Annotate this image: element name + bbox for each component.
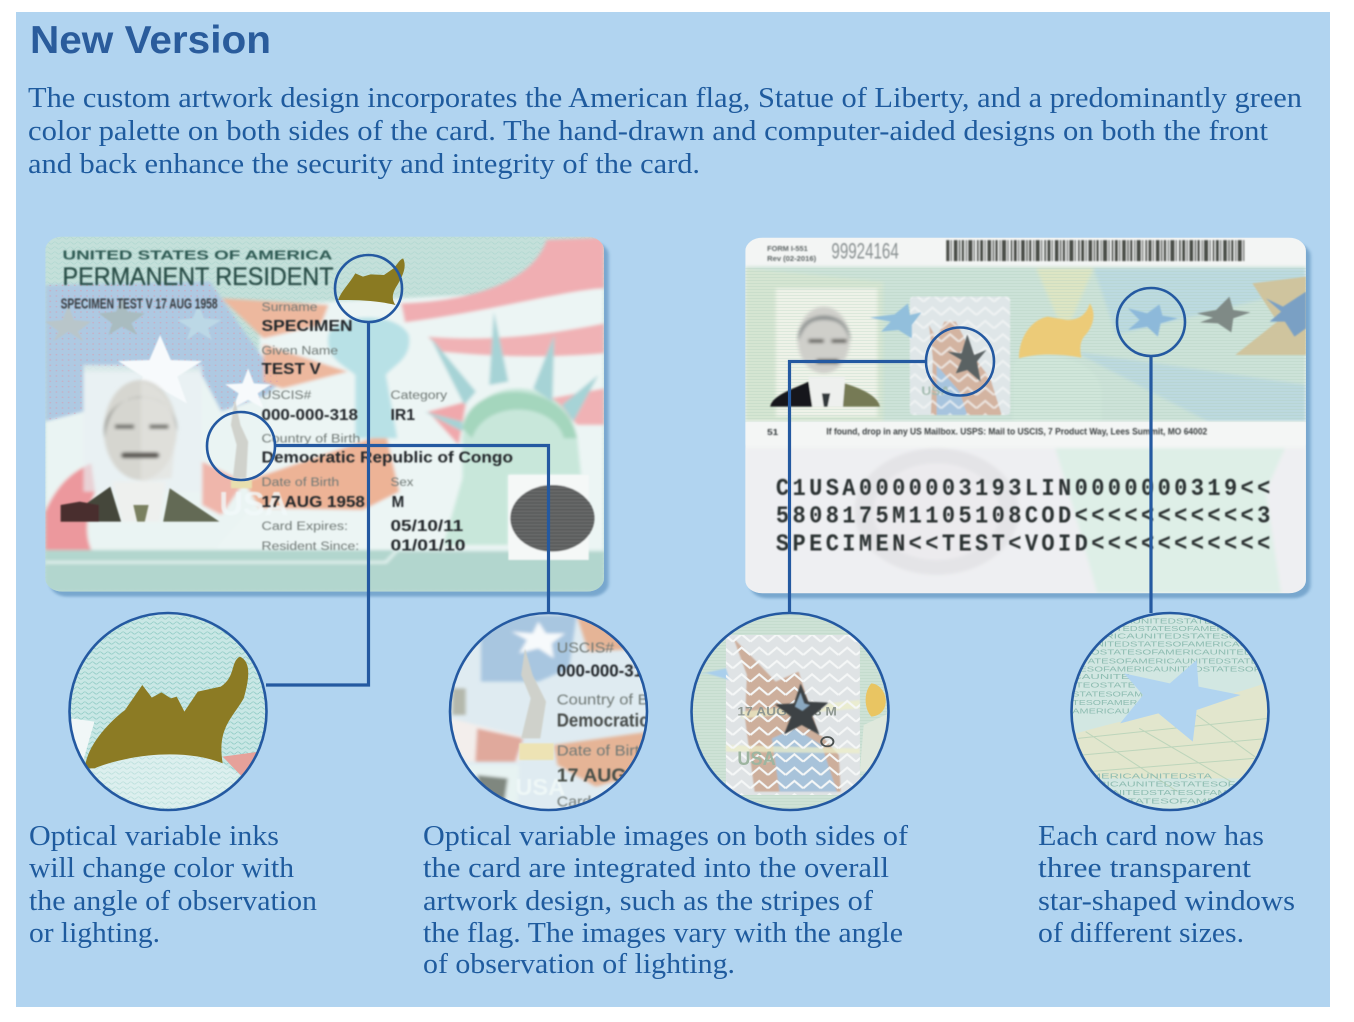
caption: star-shaped windows: star-shaped windows <box>1038 886 1295 917</box>
zoom circle: optical variable image, statue: Card Expires <box>557 795 649 810</box>
thin statue hologram <box>220 400 286 514</box>
card data fields: 17 AUG 1958 <box>262 494 365 511</box>
machine readable zone <box>776 475 1270 558</box>
card data fields: 000-000-318 <box>262 407 358 424</box>
portrait photo <box>102 379 179 482</box>
card data fields: 05/10/11 <box>391 518 463 535</box>
card data fields <box>262 300 513 554</box>
optical variable ink star <box>947 334 986 382</box>
zoom circle: optical variable image, star: 17 AUG 1958 M <box>737 705 837 718</box>
zoom circle: optical variable image, statue: 17 AUG 1958 <box>557 766 675 786</box>
machine readable zone: SPECIMEN<<TEST<VOID<<<<<<<<<<< <box>776 531 1270 558</box>
card data fields: Given Name <box>262 343 338 357</box>
card data fields: Country of Birth <box>262 431 360 445</box>
caption: optical variable images: the card are integrated into the overall <box>423 853 889 884</box>
card data fields: M <box>392 494 404 511</box>
zoom circle: optical variable image, statue <box>451 614 646 809</box>
card data fields: Sex <box>391 475 414 489</box>
zoom circle: transparent star window <box>1068 612 1269 812</box>
caption: optical variable inks: Optical variable inks <box>29 821 279 852</box>
ring: window zoom <box>1072 613 1268 810</box>
caption: optical variable images: artwork design, such as the stripes of <box>423 886 874 917</box>
ring: statue zoom <box>450 613 647 810</box>
zoom circle: optical variable image, statue: Country of Birth <box>557 692 672 708</box>
zoom circle: optical variable image, statue: USA <box>515 775 565 801</box>
zoom circle: optical variable image, statue: 000-000-318 <box>557 661 653 681</box>
form number text: Rev (02-2016) <box>767 254 816 263</box>
white text band <box>745 422 1306 445</box>
form number text: FORM I-551 <box>767 244 808 253</box>
flag stars <box>45 297 271 408</box>
card header text <box>61 248 334 312</box>
grey star <box>1197 297 1250 332</box>
card data fields: TEST V <box>262 361 321 378</box>
zoom circle: transparent star window: ERICAUNITEDSTATESOFA <box>1089 780 1244 789</box>
card: front of permanent resident card <box>45 237 609 597</box>
zoom circle: transparent star window: UNITEDSTATESOFAM <box>1105 788 1227 797</box>
zoom circle: transparent star window: TESOFAMER <box>1072 698 1138 707</box>
callout leader: ink <box>266 322 368 685</box>
torch flame, yellow <box>1019 303 1093 358</box>
zoom circle: optical variable image, star <box>690 612 892 812</box>
caption: optical variable images <box>423 821 909 980</box>
zoom circle: optical variable image, statue: USCIS# <box>557 640 614 656</box>
zoom circle: optical variable image, star: USA <box>737 748 776 770</box>
gold chevron with blue star <box>1235 277 1306 355</box>
zoom circle: transparent star window: CAUNITEDSTATES <box>1116 617 1220 625</box>
machine readable zone: 5808175M1105108COD<<<<<<<<<<<3 <box>776 503 1270 530</box>
card header text: SPECIMEN TEST V 17 AUG 1958 <box>61 296 218 312</box>
card data fields: Date of Birth <box>262 475 339 489</box>
ring: star window on back <box>1117 288 1185 356</box>
heading: New Version: New Version <box>30 19 271 62</box>
zoom circle: transparent star window: AUNITEDSTATESOFAMERICAUN <box>1080 640 1256 648</box>
star window: right <box>1128 304 1178 337</box>
card: back of permanent resident card <box>745 238 1311 598</box>
star window: left <box>870 303 921 338</box>
intro text block: color palette on both sides of the card. The hand-drawn and computer-aided designs on both the front <box>28 116 1268 147</box>
card data fields: 01/01/10 <box>391 538 466 554</box>
caption: optical variable images: Optical variable images on both sides of <box>423 821 909 852</box>
callout leader: statue image <box>275 446 548 613</box>
card data fields: Category <box>391 388 448 402</box>
thin statue hologram: USA <box>219 485 288 522</box>
card header text: PERMANENT RESIDENT <box>63 262 334 291</box>
barcode <box>946 240 1245 261</box>
ring: star detail on back <box>926 328 994 396</box>
card: back of permanent resident card: If found, drop in any US Mailbox. USPS: Mail to USCIS, 7 Product Way, Lees Summit, MO 64002 <box>826 427 1207 437</box>
card data fields: Surname <box>262 300 317 314</box>
form number text: 99924164 <box>831 240 899 264</box>
caption: optical variable inks: will change color with <box>29 853 294 884</box>
caption: optical variable inks <box>29 821 317 949</box>
zoom circle: optical variable image, statue: Date of Birth <box>557 744 649 759</box>
zoom circle: transparent star window: UNITEDSTATESOFAMERICA <box>1097 624 1244 633</box>
zoom circle: transparent star window: TATESOFAME <box>1128 797 1216 805</box>
callout leader: star image <box>790 362 926 613</box>
optical variable ink flame <box>338 258 405 305</box>
caption: optical variable inks: the angle of observation <box>29 886 317 917</box>
intro text block: The custom artwork design incorporates the American flag, Statue of Liberty, and a predominantly green <box>28 83 1302 114</box>
caption: optical variable inks: or lighting. <box>29 918 160 949</box>
ring: star zoom <box>692 613 888 810</box>
zoom circle: transparent star window: MERICAUNITEDSTATESOFA <box>1086 632 1255 640</box>
caption: star-shaped windows: of different sizes. <box>1038 918 1244 949</box>
card: back of permanent resident card: 51 <box>767 428 778 437</box>
hologram panel <box>910 297 1010 415</box>
caption: star-shaped windows <box>1038 821 1295 949</box>
zoom circle: transparent star window: CAUNITE <box>1072 672 1130 681</box>
zoom circle: transparent star window: TEOSTATESOFAMERICAUNITEDS <box>1076 648 1260 656</box>
hologram panel: USA <box>921 384 950 398</box>
zoom circle: transparent star window: TESOFAMERICAUNITEDSTATESOFA <box>1072 665 1268 674</box>
intro text block <box>28 83 1302 180</box>
zoom circle: transparent star window: AMERICAU <box>1072 707 1130 715</box>
zoom circle: transparent star window: STATESOFAMERICAUNITEDSTATES <box>1074 657 1266 665</box>
card data fields: Resident Since: <box>262 539 359 553</box>
card data fields: IR1 <box>391 407 415 424</box>
ring: ink detail on front <box>335 255 402 322</box>
zoom circle: transparent star window: STATESOFAM <box>1072 690 1143 699</box>
intro text block: and back enhance the security and integrity of the card. <box>28 149 700 180</box>
caption: star-shaped windows: Each card now has <box>1038 821 1264 852</box>
machine readable zone: C1USA0000003193LIN0000000319<< <box>776 475 1270 502</box>
card data fields: Democratic Republic of Congo <box>262 449 513 466</box>
card data fields: USCIS# <box>262 388 312 402</box>
fingerprint <box>508 475 594 560</box>
ring: ink zoom <box>70 613 266 810</box>
zoom circle: transparent star window: AMERICAUNITEDSTA <box>1082 772 1213 780</box>
zoom circle: optical variable image, statue: Democratic <box>557 711 649 731</box>
caption: optical variable images: the flag. The images vary with the angle <box>423 918 903 949</box>
card data fields: Card Expires: <box>262 519 348 533</box>
zoom circle: optical variable ink <box>68 612 270 812</box>
zoom circle: transparent star window: ITEOSTATE <box>1072 681 1135 690</box>
card data fields: SPECIMEN <box>262 318 353 335</box>
form number text <box>766 242 899 264</box>
callout leader: star window <box>1149 356 1153 613</box>
portrait photo <box>798 307 851 373</box>
caption: star-shaped windows: three transparent <box>1038 853 1251 884</box>
ring: statue detail on front <box>207 412 275 480</box>
card header text: UNITED STATES OF AMERICA <box>63 248 332 263</box>
caption: optical variable images: of observation of lighting. <box>423 949 735 980</box>
